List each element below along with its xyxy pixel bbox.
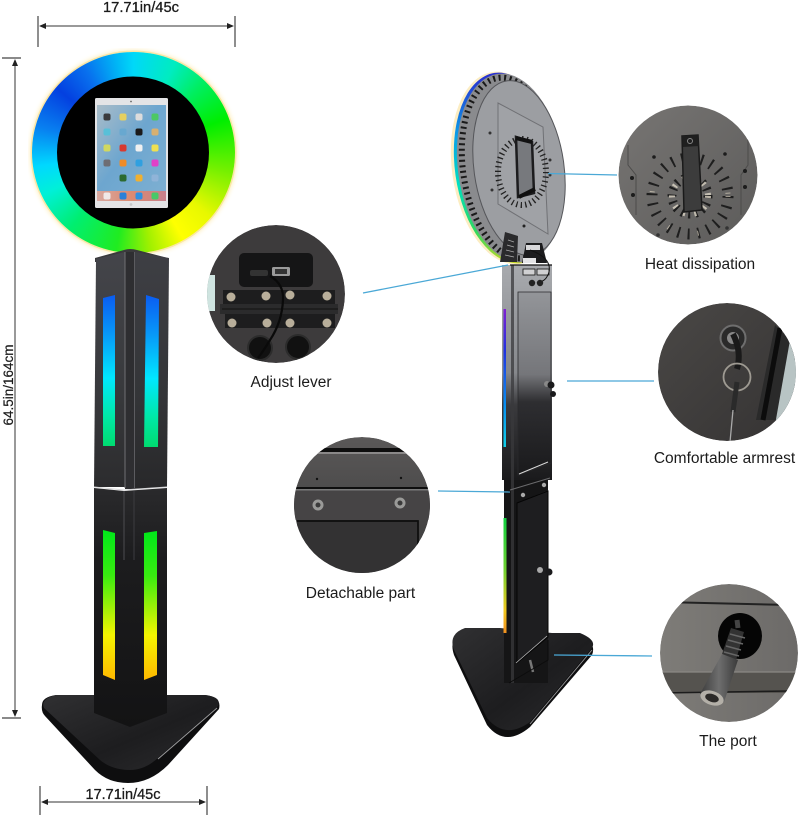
neck xyxy=(95,249,168,262)
lower side knob xyxy=(537,567,552,576)
base xyxy=(42,695,219,783)
detail circle xyxy=(618,106,758,244)
upper LED strips xyxy=(103,295,159,447)
joint with screws xyxy=(510,478,550,503)
front view stand xyxy=(28,48,240,783)
detail circle xyxy=(293,437,433,575)
side view stand xyxy=(439,64,593,737)
upper post xyxy=(94,252,169,489)
rear disc xyxy=(439,64,577,272)
upper door panel xyxy=(518,292,551,475)
tablet xyxy=(95,98,168,208)
callout: heat dissipation xyxy=(618,106,758,273)
callout: detachable part xyxy=(293,437,433,602)
callout: comfortable armrest: Comfortable armrest xyxy=(654,450,796,467)
callout: adjust lever: Adjust lever xyxy=(251,374,331,391)
callout: adjust lever xyxy=(205,225,345,391)
side post xyxy=(502,265,552,683)
joint seam xyxy=(94,487,167,490)
height dimension: 64.5in/164cm xyxy=(1,344,16,426)
callout: the port: The port xyxy=(699,733,758,750)
height dimension xyxy=(1,58,21,718)
callout lines xyxy=(363,174,654,656)
lower post xyxy=(94,488,167,727)
top width dimension: 17.71in/45c xyxy=(103,0,179,16)
callout: the port xyxy=(660,584,800,750)
upper side knob xyxy=(544,381,556,397)
callout: comfortable armrest xyxy=(654,303,800,467)
side LED strips xyxy=(504,309,506,633)
black inner disc xyxy=(57,76,209,228)
detail circle xyxy=(205,225,345,363)
detail circle xyxy=(660,584,800,722)
bottom width dimension: 17.71in/45c xyxy=(86,787,160,803)
ring light xyxy=(28,48,240,260)
callout: heat dissipation: Heat dissipation xyxy=(645,256,755,273)
bottom width dimension xyxy=(40,786,207,815)
detail circle xyxy=(658,303,800,442)
top width dimension xyxy=(38,0,235,47)
lower LED strips xyxy=(103,530,157,680)
lower door panel xyxy=(517,491,548,663)
callout: detachable part: Detachable part xyxy=(306,585,416,602)
hinge and cable xyxy=(510,243,552,286)
side base xyxy=(452,628,593,737)
